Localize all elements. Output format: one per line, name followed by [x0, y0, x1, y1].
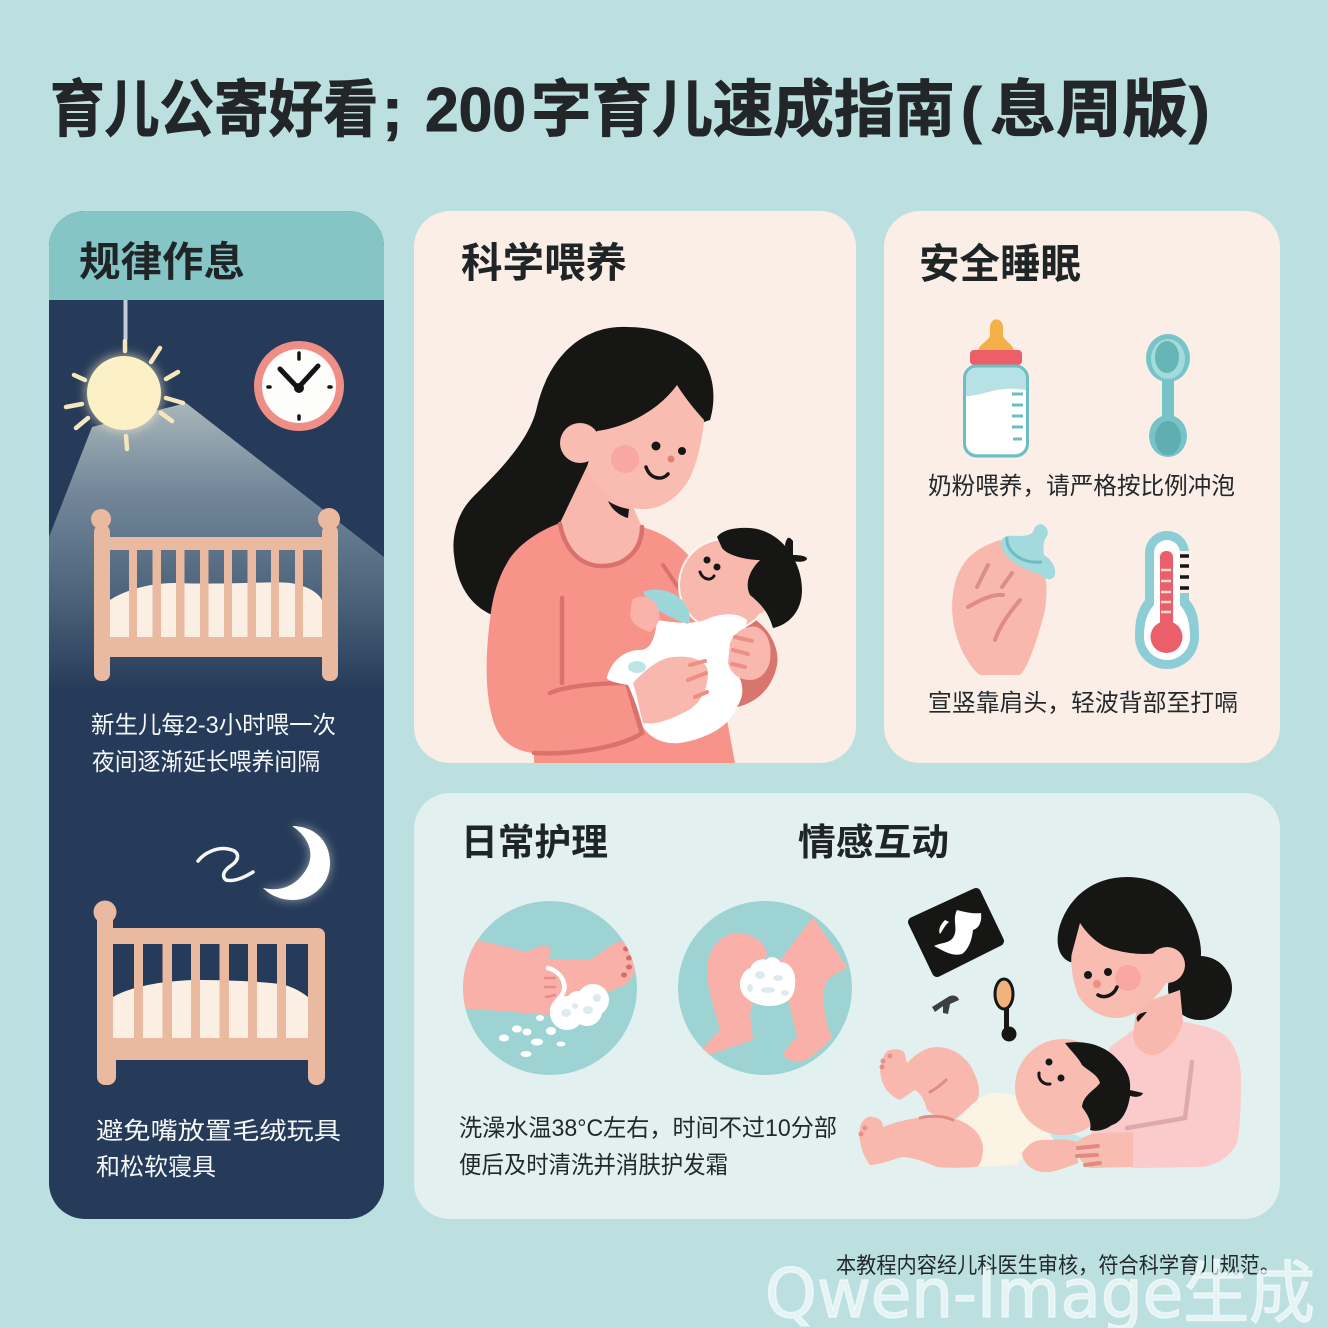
- icon: hand holding nipple: [952, 524, 1055, 675]
- panel: regular routine: [49, 211, 384, 1219]
- heading: safe sleep: 安全睡眠: [919, 241, 1081, 287]
- title: 200: [425, 76, 526, 145]
- title: (: [961, 76, 982, 145]
- heading: daily care: 日常护理: [461, 822, 608, 863]
- icon: crib with light: [91, 508, 340, 681]
- panel: daily care and interaction: [414, 793, 1280, 1219]
- text: bath and care note: 便后及时清洗并消肤护发霜: [459, 1152, 728, 1179]
- panel: safe sleep: [884, 211, 1280, 763]
- text: safe sleep note: 避免嘴放置毛绒玩具: [96, 1118, 341, 1145]
- text: bath and care note: [459, 1115, 837, 1179]
- illustration: mother and baby playing: [858, 877, 1241, 1172]
- icon: black and white card: [913, 893, 999, 972]
- title: 字育儿速成指南: [531, 76, 955, 145]
- icon: bath foot circle: [460, 901, 638, 1075]
- text: safe sleep note: [96, 1118, 341, 1181]
- text: bath and care note: 洗澡水温38°C左右，时间不过10分部: [459, 1115, 837, 1142]
- panel: scientific feeding: [414, 211, 856, 763]
- heading: regular routine: 规律作息: [79, 239, 245, 285]
- icon: moon and squiggle: [198, 826, 330, 900]
- text: burping note: 宣竖靠肩头，轻波背部至打嗝: [928, 690, 1238, 717]
- heading: scientific feeding: 科学喂养: [461, 240, 627, 286]
- icon: crib safe: [94, 900, 325, 1085]
- illustration: mother feeding baby: [453, 327, 807, 763]
- heading: emotional interaction: 情感互动: [798, 822, 949, 863]
- icon: clock: [254, 341, 344, 431]
- icon: baby bottle: [964, 319, 1028, 456]
- text: feeding interval: 夜间逐渐延长喂养间隔: [92, 749, 320, 776]
- icon: spoon: [1146, 334, 1190, 457]
- footer note: 本教程内容经儿科医生审核，符合科学育儿规范。: [836, 1253, 1280, 1278]
- title: ;: [382, 76, 403, 145]
- icon: thermometer: [1135, 531, 1199, 669]
- title: 育儿公寄好看: [50, 76, 378, 145]
- text: feeding interval: [91, 712, 336, 776]
- icon: diaper care circle: [678, 901, 852, 1075]
- text: feeding interval: 新生儿每2-3小时喂一次: [91, 712, 336, 739]
- text: safe sleep note: 和松软寝具: [96, 1154, 216, 1181]
- icon: ceiling lamp sun: [66, 300, 183, 449]
- title: ): [1189, 76, 1210, 145]
- icon: small toys: [932, 979, 1016, 1042]
- title: 息周版: [990, 76, 1188, 145]
- light cone: [49, 403, 384, 690]
- title: [50, 76, 1210, 145]
- text: formula feeding note: 奶粉喂养，请严格按比例冲泡: [928, 473, 1235, 500]
